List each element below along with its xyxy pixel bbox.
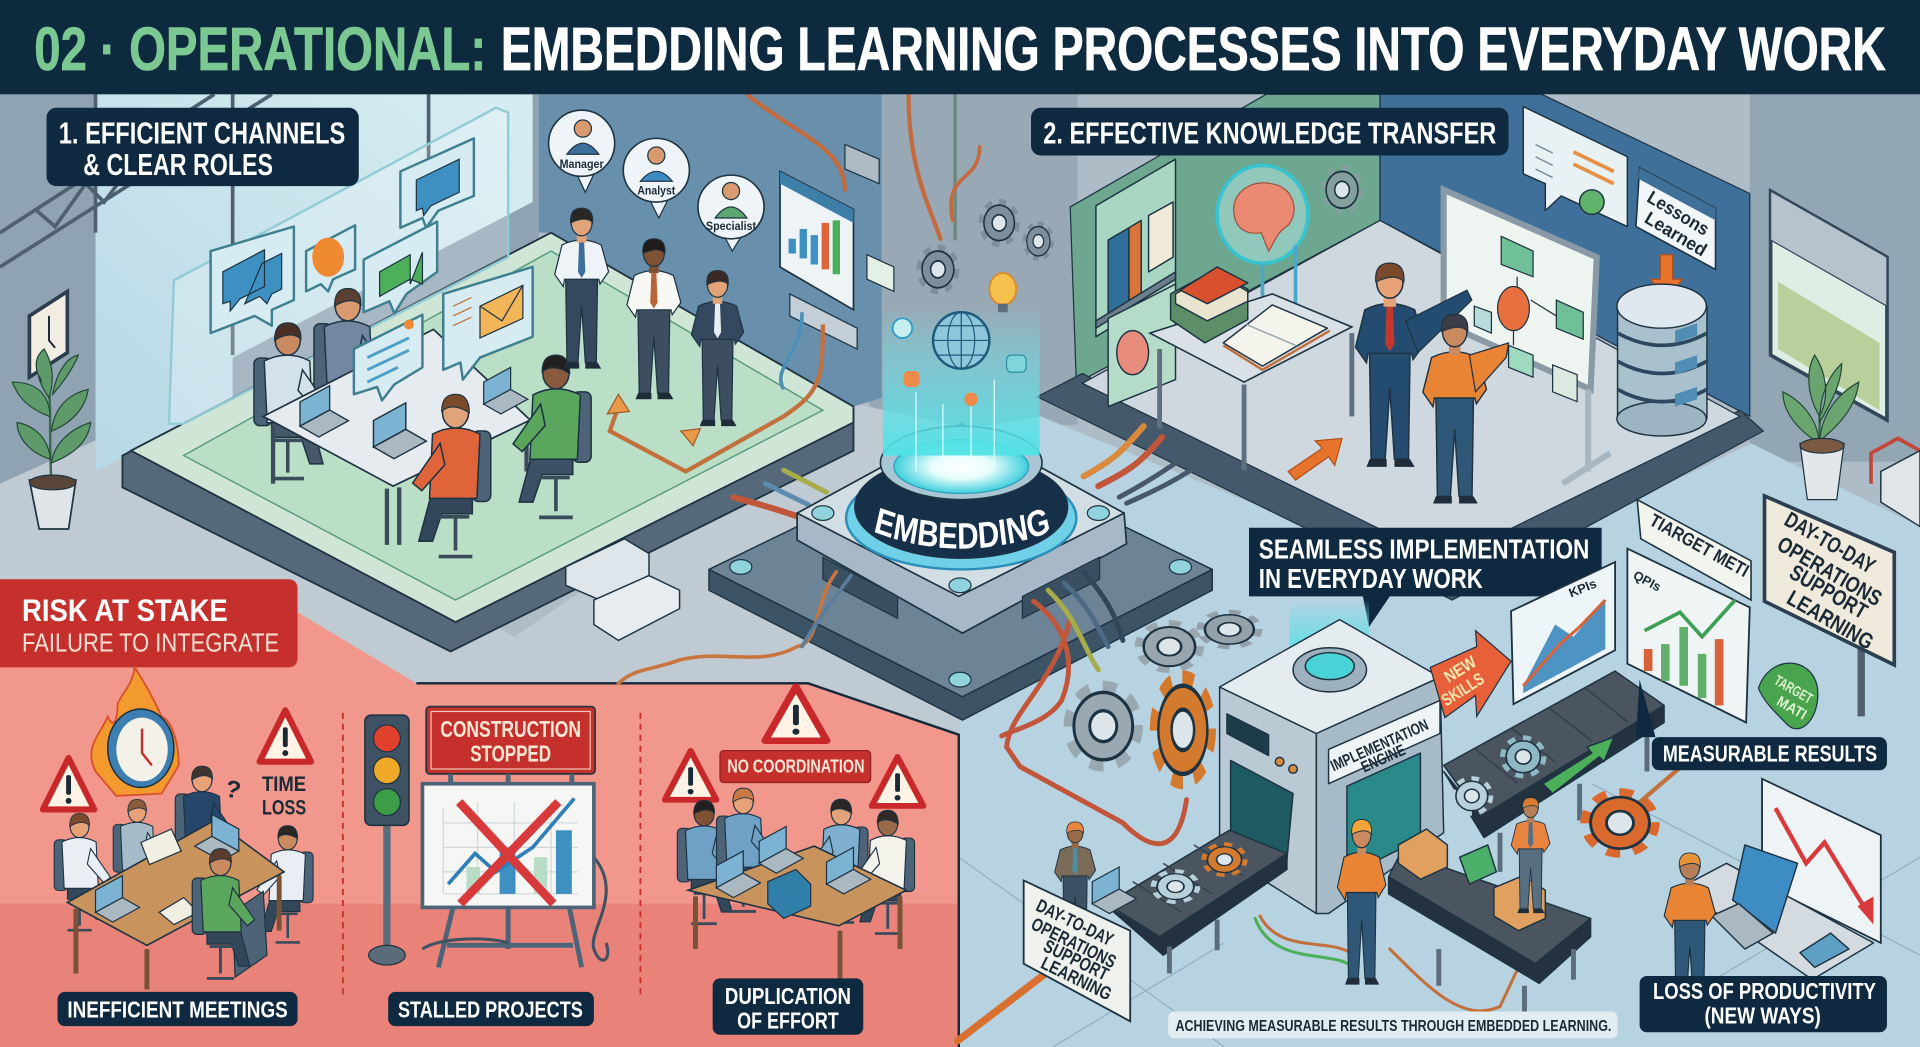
platform floor <box>1082 220 1740 561</box>
warning icons right scene <box>665 687 923 806</box>
hub body sides <box>797 513 1127 633</box>
engine left conveyor <box>1107 830 1287 974</box>
window glass <box>96 94 533 471</box>
large glass board <box>169 108 508 424</box>
panel: risk at stake <box>0 579 923 1035</box>
title banner: 02 · OPERATIONAL: <box>34 15 486 83</box>
worker at desk <box>1664 853 1715 1005</box>
risk label <box>0 579 298 667</box>
caption: ACHIEVING MEASURABLE RESULTS THROUGH EMBEDDED LEARNING. <box>1176 1018 1611 1035</box>
connecting cables <box>618 572 1690 1041</box>
manager standing <box>555 208 609 369</box>
green wall <box>1070 94 1380 383</box>
seated colleagues front <box>413 355 591 557</box>
KPI bar chart card: QPIs <box>1631 567 1664 594</box>
whiteboard <box>1444 190 1610 484</box>
hub indicator lights <box>730 506 1191 687</box>
implementation engine label: IMPLEMENTATION <box>1328 717 1431 775</box>
floor arrow <box>1288 438 1342 480</box>
plant left <box>12 349 91 529</box>
left wall <box>0 94 539 486</box>
left day to day sign: OPERATIONS <box>1028 913 1120 972</box>
floor grid lines <box>959 784 1920 1047</box>
table laptops <box>300 367 528 459</box>
left day to day sign: SUPPORT <box>1040 935 1113 985</box>
time loss text: LOSS <box>262 796 306 819</box>
seated colleagues behind table <box>254 289 389 479</box>
target met bubble: TARGET <box>1771 673 1815 708</box>
beam streaks <box>916 380 994 471</box>
time loss text: TIME <box>262 773 306 796</box>
caption <box>1168 1011 1618 1038</box>
right window <box>1771 191 1887 420</box>
right day to day sign: DAY-TO-DAY <box>1780 507 1880 579</box>
KPI chart card <box>1511 562 1615 704</box>
panel: efficient channels scene <box>211 110 894 557</box>
wall gear <box>1325 171 1359 209</box>
seamless implementation callout: IN EVERYDAY WORK <box>1259 563 1483 594</box>
engine worker <box>1337 819 1386 985</box>
loss of productivity label: (NEW WAYS) <box>1704 1003 1821 1029</box>
database <box>1617 284 1707 436</box>
right day to day sign <box>1764 496 1894 716</box>
red lower band <box>0 904 959 1047</box>
presenter <box>1356 263 1472 467</box>
platform base <box>1037 373 1763 600</box>
embedding hub <box>708 311 1213 721</box>
engine body <box>1220 620 1444 914</box>
small device <box>867 255 894 291</box>
blue back wall <box>539 94 882 407</box>
label: efficient channels: 1. EFFICIENT CHANNELS <box>59 116 345 150</box>
new skills arrow: SKILLS <box>1438 668 1488 710</box>
divider edge <box>416 683 959 1047</box>
time loss text <box>262 773 306 819</box>
book stack <box>1171 267 1248 343</box>
right day to day sign: SUPPORT <box>1785 559 1872 624</box>
implementation engine label: ENGINE <box>1359 742 1408 776</box>
hub core rim <box>880 426 1042 500</box>
separators <box>343 713 640 998</box>
teal light beam <box>883 306 1040 456</box>
plant right <box>1783 355 1859 500</box>
globe <box>933 312 989 369</box>
seated worker <box>1055 822 1136 944</box>
platform inner zone <box>184 251 823 600</box>
risk label: FAILURE TO INTEGRATE <box>22 629 279 657</box>
database arrow <box>1651 255 1682 299</box>
hub ports <box>823 557 1100 618</box>
panel: implementation scene <box>1024 496 1894 1038</box>
title banner <box>0 0 1920 94</box>
loss productivity chart <box>1762 779 1881 943</box>
analyst standing <box>627 239 681 399</box>
implementation engine label <box>1328 717 1431 776</box>
steel truss <box>0 94 429 355</box>
left day to day sign: LEARNING <box>1038 952 1115 1004</box>
right edge device <box>1871 438 1920 527</box>
embedding label <box>874 508 1050 549</box>
target met bubble: MATI <box>1774 694 1809 724</box>
lessons learned card: Lessons <box>1644 186 1713 240</box>
duplication of effort label <box>713 978 863 1035</box>
new skills arrow <box>1430 631 1511 718</box>
inefficient meetings label <box>58 992 298 1026</box>
hub dome <box>855 456 1068 558</box>
red risk background <box>0 612 959 1047</box>
brain hologram <box>1217 165 1308 343</box>
right day to day sign: LEARNING <box>1783 585 1878 655</box>
target met tag <box>1637 500 1753 600</box>
desk <box>1150 294 1352 470</box>
wall shelf with books <box>1096 159 1176 407</box>
lower conveyor <box>1389 829 1591 1016</box>
construction stopped sign: CONSTRUCTION <box>440 716 581 742</box>
specialist standing <box>691 271 744 426</box>
lessons learned card: Learned <box>1641 207 1711 260</box>
floating app icons <box>893 318 1026 406</box>
right gray wall <box>1750 94 1920 462</box>
hub glow ring <box>846 467 1076 569</box>
no coordination label <box>720 751 871 782</box>
chat bubble icons on table <box>354 267 533 400</box>
light bulb <box>989 273 1016 312</box>
route arrow <box>607 394 700 446</box>
step blocks <box>566 539 680 640</box>
engine light beam <box>1289 600 1369 655</box>
conference table <box>263 329 530 545</box>
center back wall <box>869 94 1078 425</box>
label: effective knowledge transfer <box>1031 108 1509 156</box>
role bubble analyst: Analyst <box>637 185 675 198</box>
wall dashboard screen <box>780 171 853 310</box>
seamless implementation callout: SEAMLESS IMPLEMENTATION <box>1259 533 1589 564</box>
no coordination label: NO COORDINATION <box>727 756 864 777</box>
wall clock <box>29 291 67 377</box>
conveyor worker <box>1511 798 1550 913</box>
checklist card <box>1523 107 1627 227</box>
meeting table <box>67 814 284 989</box>
role bubble manager <box>549 110 615 192</box>
hub core <box>894 440 1029 493</box>
label: efficient channels: & CLEAR ROLES <box>83 148 273 182</box>
measurable results label <box>1652 737 1887 770</box>
orange gear <box>1589 796 1651 850</box>
duplication people <box>677 788 915 933</box>
embedding label: EMBEDDING <box>874 508 1050 549</box>
laptop desk <box>1680 845 1873 980</box>
clock on fire <box>91 667 179 796</box>
meeting person green <box>192 849 255 978</box>
green platform base <box>122 235 853 651</box>
KPI chart card: KPIs <box>1567 576 1599 600</box>
duplication of effort label: OF EFFORT <box>737 1008 839 1034</box>
new skills arrow: NEW <box>1440 651 1480 687</box>
wall junction box <box>845 144 879 184</box>
construction stopped sign: STOPPED <box>470 741 551 767</box>
gears cluster top center <box>921 204 1051 289</box>
hub body top <box>797 424 1124 596</box>
KPI bar chart card <box>1627 549 1750 722</box>
orange cables top <box>747 94 980 239</box>
left day to day sign <box>1024 880 1130 1021</box>
warning icons left scene <box>43 710 311 809</box>
construction stopped sign <box>426 707 595 774</box>
listener in orange <box>1423 314 1509 504</box>
meeting chair front <box>233 891 267 977</box>
open book <box>1223 305 1330 370</box>
stalled projects label <box>388 992 594 1026</box>
duplication of effort label: DUPLICATION <box>725 983 851 1009</box>
role bubble specialist: Specialist <box>706 220 756 233</box>
duplication table <box>688 827 906 989</box>
cable bundles <box>733 426 1205 518</box>
role bubble specialist <box>698 175 764 251</box>
chat bubble icons upper <box>211 138 474 333</box>
lessons learned card <box>1636 168 1716 269</box>
gears by engine <box>1072 614 1255 776</box>
lower right floor <box>959 416 1920 1047</box>
stalled chart board <box>422 774 608 967</box>
label: effective knowledge transfer: 2. EFFECTIVE KNOWLEDGE TRANSFER <box>1043 116 1496 150</box>
blue wall <box>1380 94 1750 416</box>
green platform top <box>131 233 853 622</box>
seamless implementation callout <box>1249 528 1602 627</box>
label: efficient channels <box>47 108 359 186</box>
question mark: ? <box>223 775 243 805</box>
role bubble manager: Manager <box>560 158 604 171</box>
target met tag: TIARGET METI <box>1646 509 1753 581</box>
loss of productivity label <box>1640 976 1887 1032</box>
red cross <box>459 802 558 904</box>
traffic light <box>365 715 409 965</box>
left floor <box>0 404 967 735</box>
wall socket with cables <box>610 294 857 471</box>
stalled projects label: STALLED PROJECTS <box>398 997 583 1023</box>
panel: knowledge transfer scene <box>1037 94 1920 600</box>
right day to day sign: OPERATIONS <box>1773 531 1886 611</box>
callout tail <box>1636 680 1656 737</box>
hub base plate <box>709 447 1212 720</box>
risk label: RISK AT STAKE <box>22 592 228 628</box>
meeting people <box>54 766 313 942</box>
upper conveyor <box>1444 671 1664 872</box>
inefficient meetings label: INEFFICIENT MEETINGS <box>67 997 288 1023</box>
left day to day sign: DAY-TO-DAY <box>1033 895 1117 950</box>
target met bubble <box>1758 663 1818 729</box>
role bubble analyst <box>623 138 689 218</box>
